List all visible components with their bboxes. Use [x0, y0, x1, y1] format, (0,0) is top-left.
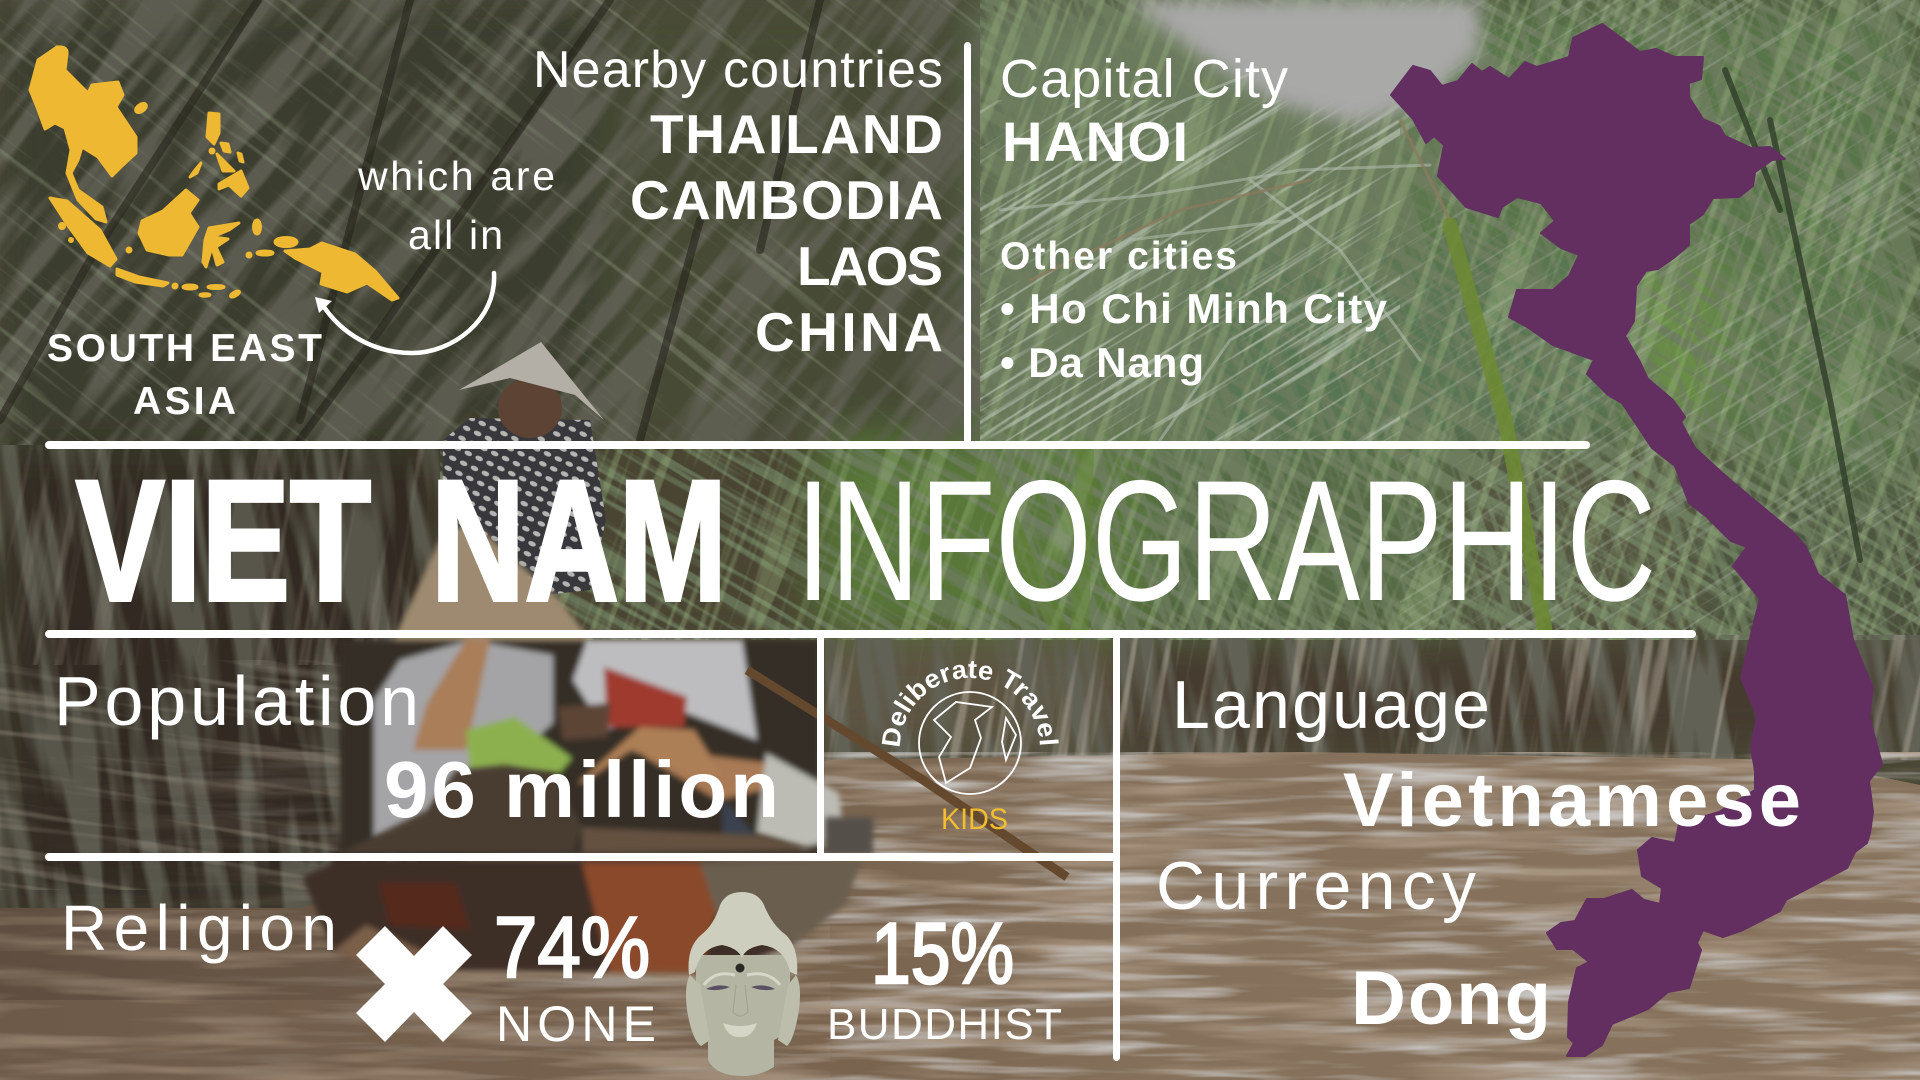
capital and other cities: HANOI: [1002, 110, 1188, 173]
capital and other cities: • Ho Chi Minh City: [1000, 285, 1388, 332]
curved arrow to map: [315, 273, 494, 353]
label: South East Asia: ASIA: [133, 380, 236, 423]
map: South East Asia: [30, 47, 398, 300]
note: which are all in: which are: [357, 153, 555, 199]
stat: 15% buddhist: [827, 906, 1062, 1049]
nearby countries list: LAOS: [797, 235, 943, 297]
stat: population: 96 million: [384, 745, 779, 834]
title: NAM: [431, 445, 727, 637]
logo: Deliberate Travel Kids: Deliberate Travel: [882, 661, 1059, 746]
capital and other cities: Other cities: [1000, 235, 1237, 278]
nearby countries list: [533, 41, 943, 363]
stat: currency: [1156, 848, 1551, 1041]
capital and other cities: • Da Nang: [1000, 339, 1204, 386]
stat: 15% buddhist: BUDDHIST: [827, 1000, 1062, 1049]
stat: 74% none: [494, 900, 656, 1052]
nearby countries list: CHINA: [755, 301, 943, 363]
logo: Deliberate Travel Kids: [882, 661, 1059, 836]
note: which are all in: all in: [408, 212, 503, 258]
stat: population: [54, 662, 779, 834]
stat: language: Language: [1172, 667, 1490, 743]
capital and other cities: [1000, 49, 1388, 386]
oar: [747, 670, 1067, 877]
nearby countries list: Nearby countries: [533, 41, 943, 99]
note: which are all in: [357, 153, 555, 258]
river water: [0, 752, 1920, 1080]
stat: 15% buddhist: 15%: [871, 906, 1014, 1002]
icon: Buddha head: [686, 892, 800, 1076]
stat: currency: Dong: [1351, 956, 1551, 1041]
nearby countries list: CAMBODIA: [630, 169, 943, 231]
icon: cross mark: [356, 926, 472, 1042]
stat: population: Population: [54, 662, 419, 740]
woman in conical hat: [442, 342, 606, 600]
title: [76, 445, 1656, 637]
foliage strokes: [0, 0, 1860, 630]
nearby countries list: THAILAND: [650, 103, 943, 165]
map: Vietnam: [1391, 24, 1882, 1056]
capital and other cities: Capital City: [1000, 49, 1288, 109]
stat: language: Vietnamese: [1343, 758, 1801, 843]
stat: 74% none: 74%: [494, 900, 650, 996]
label: South East Asia: SOUTH EAST: [47, 327, 322, 370]
title: VIET: [76, 445, 371, 637]
wooden boat: [302, 765, 873, 972]
logo: Deliberate Travel Kids: KIDS: [941, 803, 1008, 836]
people in the boat: [340, 520, 844, 855]
stat: language: [1172, 667, 1801, 843]
heading: religion: Religion: [61, 892, 337, 964]
label: South East Asia: [47, 327, 322, 423]
sky: [1125, 0, 1480, 125]
stat: 74% none: NONE: [496, 996, 656, 1052]
stat: currency: Currency: [1156, 848, 1476, 924]
